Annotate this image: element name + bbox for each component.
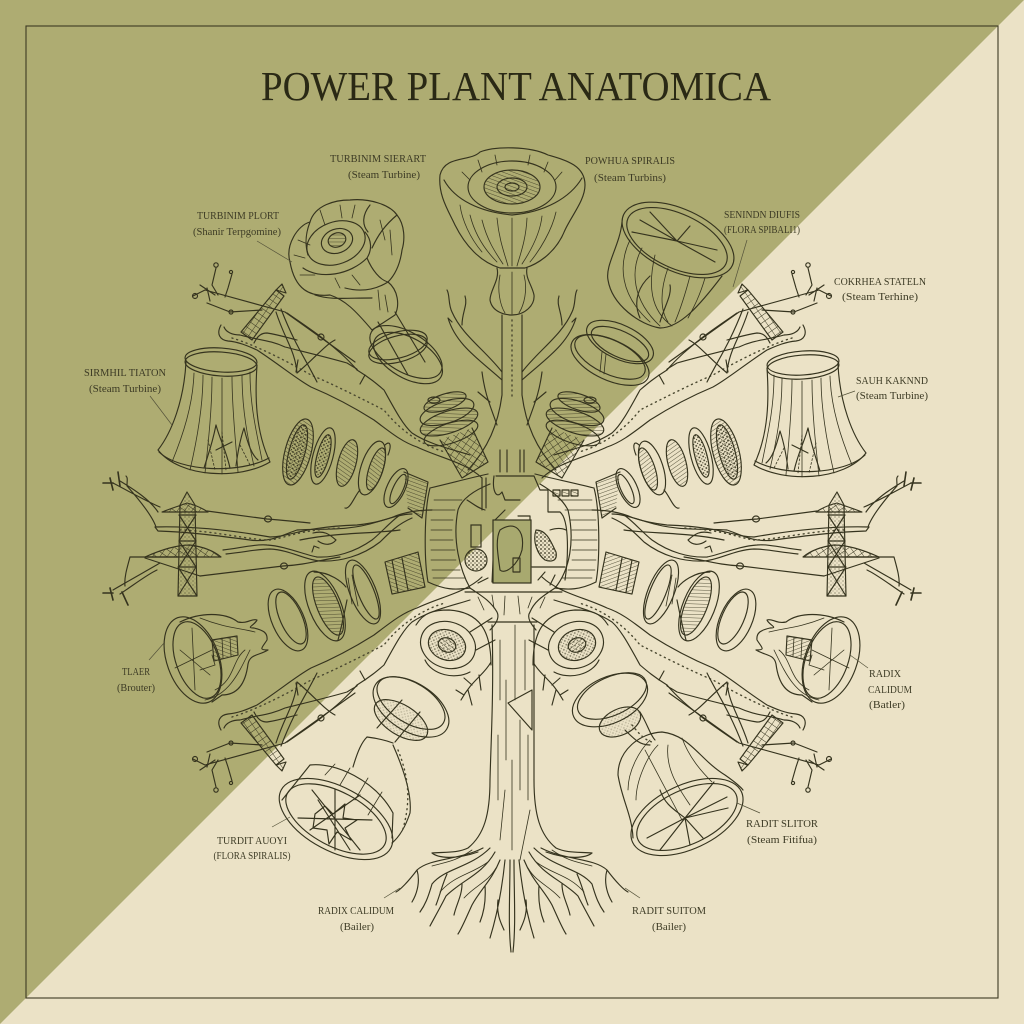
right roots [513, 780, 628, 952]
left cooling tower [158, 346, 270, 474]
upper left branch with pylon [192, 263, 482, 478]
left turbine discs [277, 416, 428, 518]
label: radit suitom: RADIT SUITOM [632, 906, 707, 917]
label: radit suitom [625, 888, 707, 933]
upper right ring band [563, 311, 660, 396]
lower left branch with pylon [192, 577, 482, 792]
left trunk twig [416, 610, 491, 705]
label: radix calidum [850, 655, 913, 711]
right boiler bell [756, 609, 871, 711]
label: sauh kaknnd [838, 376, 929, 402]
upper right turbine stack [536, 388, 607, 478]
upper right vase turbine [608, 187, 745, 328]
label: radix calidum: RADIX [869, 669, 901, 680]
lower left turbine stack [414, 614, 495, 676]
label: radix calidum lower: RADIX CALIDUM [318, 906, 395, 917]
label: turbinim sierart: TURBINIM SIERART [330, 154, 427, 165]
label: senindn diufis: SENINDN DIUFIS [724, 210, 800, 221]
lower right turbine bell [564, 662, 755, 871]
label: radix calidum lower: (Bailer) [340, 922, 375, 933]
upper left turbine stack [417, 388, 488, 478]
label: cokrhea stateln: COKRHEA STATELN [834, 277, 926, 288]
label: turbinim sierart: (Steam Turbine) [348, 170, 421, 181]
left boiler bell [153, 609, 268, 711]
right trunk twig [533, 610, 608, 705]
lower right branch with pylon [542, 577, 832, 792]
main trunk [490, 625, 534, 860]
label: senindn diufis: (FLORA SPIBALI1) [724, 225, 800, 236]
label: tlaer: TLAER [122, 667, 150, 678]
label: turdit auoyi [214, 817, 291, 862]
label: cokrhea stateln [834, 277, 926, 303]
right transmission tower and branches [592, 472, 921, 605]
lower right turbine stack [529, 614, 610, 676]
label: sauh kaknnd: (Steam Turbine) [856, 391, 929, 402]
label: turbinim plort: TURBINIM PLORT [197, 211, 280, 222]
lower left turbine bell [266, 664, 459, 876]
label: radit suitom: (Bailer) [652, 922, 687, 933]
left transmission tower and branches [103, 472, 432, 605]
lower left rotor rings [260, 552, 425, 657]
label: turdit auoyi: (FLORA SPIRALIS) [214, 851, 291, 862]
left roots [396, 780, 511, 952]
label: sirmhil tiaton: SIRMHIL TIATON [84, 368, 166, 379]
label: radix calidum lower [318, 888, 400, 933]
label: sirmhil tiaton: (Steam Turbine) [89, 384, 162, 395]
label: powhua spiralis [585, 156, 675, 184]
label: radit slitor: RADIT SLITOR [746, 819, 818, 830]
label: tlaer: (Brouter) [117, 683, 155, 694]
label: radit slitor [737, 803, 818, 846]
label: sirmhil tiaton [84, 368, 172, 425]
right turbine discs [596, 416, 747, 518]
upper right branch with pylon [542, 263, 832, 478]
label: radix calidum: (Batler) [869, 700, 906, 711]
label: turbinim plort [193, 211, 292, 262]
top centre flower [440, 148, 585, 470]
label: senindn diufis [724, 210, 800, 287]
title: POWER PLANT ANATOMICA [261, 63, 771, 109]
label: powhua spiralis: POWHUA SPIRALIS [585, 156, 675, 167]
upper left flower [289, 200, 451, 394]
label: radit slitor: (Steam Fitifua) [747, 835, 818, 846]
label: turdit auoyi: TURDIT AUOYI [217, 836, 287, 847]
label: radix calidum: CALIDUM [868, 685, 913, 696]
right cooling tower [754, 349, 866, 477]
labels and leader lines [84, 154, 929, 933]
label: turbinim plort: (Shanir Terpgomine) [193, 227, 281, 238]
lower right rotor rings [599, 552, 764, 657]
central core [425, 450, 599, 630]
anatomical plant illustration [103, 148, 921, 952]
label: cokrhea stateln: (Steam Terhine) [842, 292, 919, 303]
label: powhua spiralis: (Steam Turbins) [594, 173, 667, 184]
label: turbinim sierart [330, 154, 427, 181]
label: sauh kaknnd: SAUH KAKNND [856, 376, 928, 387]
label: tlaer [117, 643, 164, 694]
